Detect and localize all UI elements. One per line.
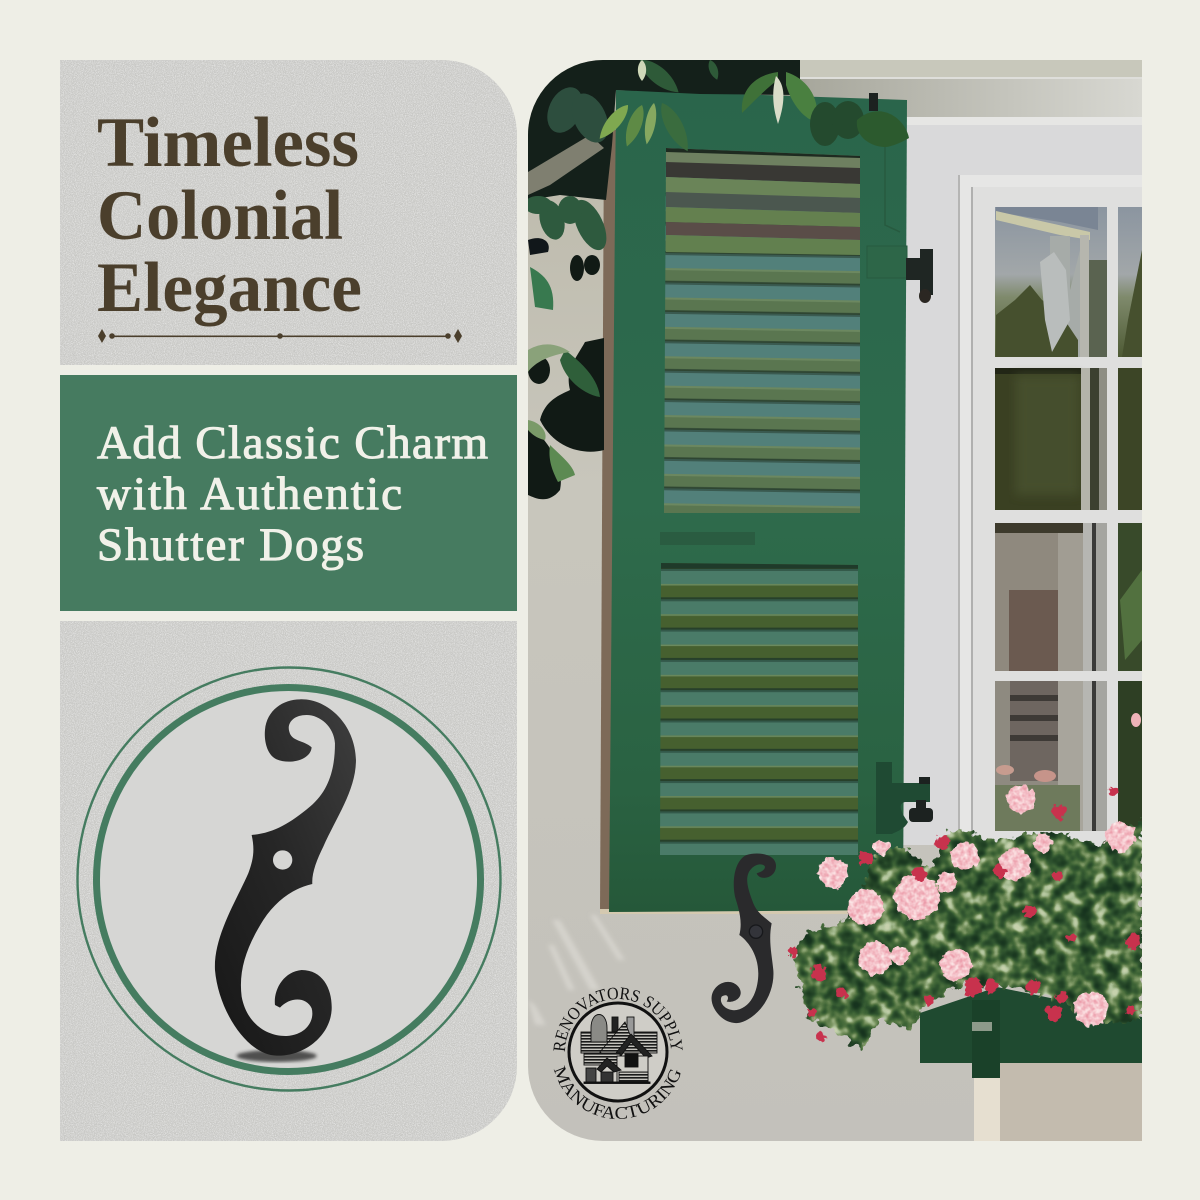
shutter frame <box>609 90 907 912</box>
banner background <box>60 375 517 611</box>
panel stiles and rail marks <box>660 145 907 545</box>
bright leaves from top stem <box>600 60 718 151</box>
sunlight streaks on wall <box>528 915 625 1025</box>
logo house drawing <box>581 1014 657 1084</box>
climbing foliage <box>524 54 909 499</box>
flower foliage mass <box>792 820 1142 1050</box>
stone sill line <box>600 909 848 914</box>
dark foliage background <box>528 60 800 200</box>
glass row 4 <box>995 681 1142 831</box>
upper louver panel <box>660 145 865 517</box>
panel: title <box>60 60 517 365</box>
brown shutter edge <box>600 130 616 912</box>
circular product badge <box>78 668 500 1090</box>
product panel background <box>60 621 517 1141</box>
heading: Timeless Colonial Elegance: Elegance <box>97 249 362 327</box>
casing <box>958 175 1142 845</box>
heading: Timeless Colonial Elegance: Timeless <box>97 104 359 182</box>
black leaf blobs <box>528 255 604 499</box>
panel: subtitle banner <box>60 375 517 611</box>
large leaves at shutter top <box>742 72 909 147</box>
green leaves lower left <box>528 344 600 482</box>
window frame and panes <box>958 175 1142 847</box>
S-hook shutter dog on wall <box>712 853 776 1023</box>
subheading text: with Authentic <box>97 468 402 520</box>
soffit and upper white wall <box>760 60 1142 845</box>
glass row 1 <box>995 207 1142 357</box>
icon: iron S-shaped shutter dog <box>215 699 356 1062</box>
shaded wall wedge <box>528 135 604 195</box>
window box planter <box>920 987 1142 1141</box>
green louvered shutter <box>609 90 907 912</box>
subheading text: Shutter Dogs <box>97 519 364 571</box>
lower louver panel <box>655 560 865 860</box>
glass row 2 <box>995 368 1142 510</box>
heading: Timeless Colonial Elegance: Colonial <box>97 177 343 255</box>
pink blooms <box>818 785 1135 1026</box>
logo top text: RENOVATORS SUPPLY <box>553 987 683 1052</box>
logo: Renovators Supply Manufacturing <box>553 987 683 1120</box>
big dark leaves upper left <box>547 87 608 142</box>
mid leaves left side <box>528 196 606 310</box>
red buds <box>787 787 1141 1042</box>
lower shutter hinge <box>876 762 933 834</box>
logo bottom text: MANUFACTURING <box>554 1065 680 1120</box>
glass row 3 <box>995 523 1142 671</box>
upper shutter hinge <box>906 249 933 303</box>
ornamental divider <box>98 329 462 343</box>
subheading text: Add Classic Charm <box>97 417 488 469</box>
logo ring <box>569 1003 667 1101</box>
panel: photo of shuttered window <box>528 60 1142 1141</box>
stucco wall <box>528 60 1142 1141</box>
title panel background <box>60 60 517 365</box>
panel: product <box>60 621 517 1141</box>
